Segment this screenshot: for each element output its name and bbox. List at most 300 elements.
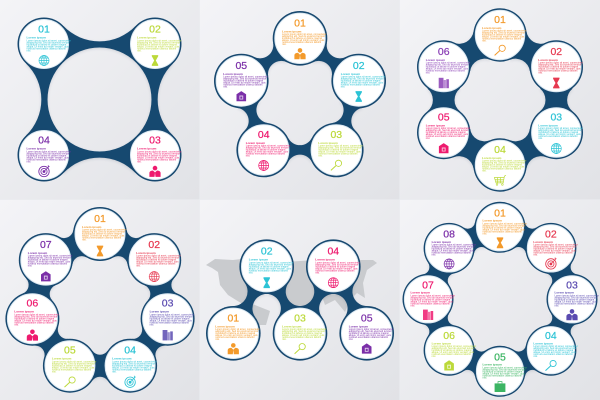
step 03: Lorem ipsum (318, 141, 338, 145)
step 05 (214, 54, 269, 108)
step 04 (236, 123, 291, 177)
step 04: nostrud exercitation ullamco laboris (315, 269, 355, 272)
step 02: adipiscing elit. Sed do eiusmod tempor (249, 263, 292, 266)
step 03: aliqua. Ut enim ad minim veniam, quis (538, 133, 581, 136)
step 02 (525, 223, 578, 274)
step 05: adipiscing elit. Sed do eiusmod tempor (349, 330, 392, 333)
step 01: incididunt ut labore et dolore magna (26, 43, 67, 46)
step 01: incididunt ut labore et dolore magna (82, 233, 122, 236)
step 01 (206, 306, 261, 361)
step 04: Lorem ipsum (533, 342, 553, 346)
step 04: nisi. (315, 271, 320, 274)
step 03: incididunt ut labore et dolore magna (137, 154, 177, 157)
step 01 (473, 8, 527, 62)
chain connectors (233, 283, 367, 317)
world map (206, 258, 377, 325)
step 03: nostrud exercitation ullamco laboris (282, 336, 322, 339)
step 07: incididunt ut labore et dolore magna (410, 298, 451, 301)
step 05: incididunt ut labore et dolore magna (349, 332, 389, 335)
step 06: aliqua. Ut enim ad minim veniam, quis (432, 351, 475, 354)
step 06: incididunt ut labore et dolore magna (14, 317, 55, 320)
step 02: aliqua. Ut enim ad minim veniam, quis (341, 82, 384, 85)
panel: four-step ring (0, 0, 200, 200)
step 01: 01 (494, 207, 506, 219)
step 03: nisi. (538, 137, 543, 140)
ring connectors (423, 223, 577, 376)
step 04: Lorem ipsum (315, 258, 335, 262)
step 03 (309, 123, 364, 177)
step 04: nisi. (482, 170, 487, 173)
step 05: nisi. (223, 86, 228, 89)
step 01: 01 (94, 213, 106, 225)
step 07: incididunt ut labore et dolore magna (28, 259, 68, 262)
step 04: 04 (124, 345, 136, 357)
step 02: incididunt ut labore et dolore magna (137, 43, 177, 46)
step 04: aliqua. Ut enim ad minim veniam, quis (315, 267, 358, 270)
step 05: aliqua. Ut enim ad minim veniam, quis (349, 334, 392, 337)
step 01: Lorem ipsum (482, 26, 502, 30)
step 04: Lorem ipsum dolor sit amet, consectetur (533, 345, 578, 348)
step 04 (103, 339, 157, 393)
step 06 (424, 325, 476, 376)
step 08: nisi. (432, 253, 436, 256)
step 05: aliqua. Ut enim ad minim veniam, quis (223, 82, 266, 85)
step 01: nostrud exercitation ullamco laboris (26, 47, 66, 50)
step 05: Lorem ipsum (482, 363, 502, 367)
step 01: Lorem ipsum (482, 219, 502, 223)
step 02: nisi. (341, 86, 345, 89)
step 02: nisi. (533, 253, 538, 256)
step 01: aliqua. Ut enim ad minim veniam, quis (482, 228, 525, 231)
step 03 (141, 292, 195, 346)
step 01: nostrud exercitation ullamco laboris (215, 336, 255, 339)
step 04: adipiscing elit. Sed do eiusmod tempor (315, 263, 358, 266)
step 04 (306, 239, 361, 294)
step 06: nisi. (426, 72, 430, 75)
step 08: nostrud exercitation ullamco laboris (432, 251, 472, 254)
step 07: aliqua. Ut enim ad minim veniam, quis (410, 300, 453, 303)
step 05: Lorem ipsum dolor sit amet, consectetur (482, 366, 527, 369)
step 01: adipiscing elit. Sed do eiusmod tempor (482, 224, 526, 227)
step 04: nostrud exercitation ullamco laboris (533, 353, 573, 356)
step 01 (18, 18, 71, 70)
step 04 (18, 128, 71, 182)
step 05: nostrud exercitation ullamco laboris (349, 336, 389, 339)
step 02: Lorem ipsum (341, 72, 360, 76)
step 01: Lorem ipsum (215, 324, 235, 328)
step 02: Lorem ipsum dolor sit amet, consectetur (137, 39, 182, 42)
step 06: Lorem ipsum dolor sit amet, consectetur (432, 345, 476, 348)
step 04: aliqua. Ut enim ad minim veniam, quis (112, 366, 155, 369)
ring connectors (427, 31, 573, 169)
step 06: 06 (27, 298, 38, 310)
step 04: nostrud exercitation ullamco laboris (482, 168, 522, 171)
step 06: nostrud exercitation ullamco laboris (426, 70, 466, 73)
panel: five-step chain on world map (200, 200, 400, 400)
step 03: adipiscing elit. Sed do eiusmod tempor (554, 296, 598, 299)
step 01: Lorem ipsum (282, 29, 302, 33)
step 03: Lorem ipsum dolor sit amet, consectetur (318, 145, 363, 148)
step 01: Lorem ipsum dolor sit amet, consectetur (82, 229, 127, 232)
step 02: 02 (148, 239, 160, 251)
step 01: aliqua. Ut enim ad minim veniam, quis (482, 36, 525, 39)
step 01: nisi. (282, 43, 287, 46)
step 01: aliqua. Ut enim ad minim veniam, quis (82, 235, 125, 238)
step 04: 04 (38, 135, 50, 147)
step 06: incididunt ut labore et dolore magna (432, 349, 472, 352)
step 08: 08 (443, 228, 455, 240)
step 06: adipiscing elit. Sed do eiusmod tempor (14, 315, 58, 318)
step 03: aliqua. Ut enim ad minim veniam, quis (150, 319, 193, 322)
step 06: adipiscing elit. Sed do eiusmod tempor (426, 64, 469, 67)
step 01 (474, 202, 527, 253)
step 02: incididunt ut labore et dolore magna (538, 66, 579, 69)
step 05 (417, 106, 470, 159)
step 06: nostrud exercitation ullamco laboris (432, 353, 472, 356)
step 02: 02 (353, 60, 365, 72)
step 02: nisi. (136, 265, 141, 268)
step 05: 05 (361, 312, 373, 324)
step 01: aliqua. Ut enim ad minim veniam, quis (26, 45, 69, 48)
step 04: incididunt ut labore et dolore magna (246, 149, 286, 152)
step 03: incididunt ut labore et dolore magna (282, 332, 322, 335)
step 02: Lorem ipsum (538, 58, 558, 62)
step 04: incididunt ut labore et dolore magna (26, 154, 67, 157)
step 01: Lorem ipsum dolor sit amet, consectetur (482, 222, 527, 225)
panel: eight-step ring (400, 200, 600, 400)
step 03: Lorem ipsum (150, 310, 169, 314)
step 03: aliqua. Ut enim ad minim veniam, quis (137, 156, 180, 159)
ring connectors (23, 230, 177, 381)
step 01: nostrud exercitation ullamco laboris (482, 230, 522, 233)
step 03: nisi. (150, 323, 154, 326)
step 02: adipiscing elit. Sed do eiusmod tempor (341, 78, 384, 81)
step 04: incididunt ut labore et dolore magna (315, 265, 356, 268)
step 02 (331, 54, 386, 108)
step 06: adipiscing elit. Sed do eiusmod tempor (432, 347, 475, 350)
step 01: Lorem ipsum dolor sit amet, consectetur (26, 39, 71, 42)
step 03: nisi. (137, 160, 142, 163)
step 05: 05 (494, 351, 506, 363)
step 02: incididunt ut labore et dolore magna (249, 265, 289, 268)
step 02: nostrud exercitation ullamco laboris (249, 269, 289, 272)
step 02: nisi. (249, 271, 253, 274)
step 05 (43, 339, 97, 393)
step 01: nisi. (215, 338, 220, 341)
step 05: Lorem ipsum dolor sit amet, consectetur (426, 127, 470, 130)
step 03 (128, 128, 182, 182)
step 03: incididunt ut labore et dolore magna (150, 317, 190, 320)
step 03: nostrud exercitation ullamco laboris (538, 135, 578, 138)
step 06: aliqua. Ut enim ad minim veniam, quis (426, 68, 469, 71)
step 04: nostrud exercitation ullamco laboris (246, 153, 286, 156)
step 08: Lorem ipsum (432, 240, 451, 244)
step 01: aliqua. Ut enim ad minim veniam, quis (282, 39, 325, 42)
step 01 (273, 11, 327, 66)
step 02: nisi. (538, 72, 543, 75)
step 03: incididunt ut labore et dolore magna (318, 149, 359, 152)
step 04: nisi. (112, 370, 117, 373)
step 08: aliqua. Ut enim ad minim veniam, quis (432, 249, 475, 252)
step 05: 05 (235, 60, 247, 72)
step 06: 06 (443, 330, 455, 342)
step 07: nostrud exercitation ullamco laboris (410, 302, 450, 305)
step 03: 03 (162, 298, 174, 310)
step 05: nostrud exercitation ullamco laboris (426, 135, 466, 138)
step 04: Lorem ipsum (246, 141, 265, 145)
step 04: nostrud exercitation ullamco laboris (26, 158, 66, 161)
step 02: adipiscing elit. Sed do eiusmod tempor (136, 257, 179, 260)
step 04: aliqua. Ut enim ad minim veniam, quis (533, 351, 576, 354)
step 02: Lorem ipsum (249, 258, 268, 262)
step 05: adipiscing elit. Sed do eiusmod tempor (482, 368, 526, 371)
panel: seven-step ring (0, 200, 200, 400)
step 04: Lorem ipsum dolor sit amet, consectetur (482, 160, 527, 163)
step 03: 03 (550, 112, 562, 124)
step 04: aliqua. Ut enim ad minim veniam, quis (246, 151, 289, 154)
step 02: incididunt ut labore et dolore magna (136, 259, 177, 262)
step 05: nisi. (52, 370, 57, 373)
step 03: Lorem ipsum (137, 147, 157, 151)
step 02: aliqua. Ut enim ad minim veniam, quis (249, 267, 292, 270)
step 02: aliqua. Ut enim ad minim veniam, quis (137, 45, 180, 48)
step 06 (417, 40, 470, 94)
step 01: 01 (494, 14, 506, 26)
step 03: nisi. (554, 304, 559, 307)
step 06: Lorem ipsum (432, 342, 451, 346)
step 03 (530, 106, 583, 159)
ring connectors (26, 26, 173, 173)
step 04: 04 (545, 330, 557, 342)
step 01: Lorem ipsum dolor sit amet, consectetur (282, 33, 327, 36)
step 04: Lorem ipsum dolor sit amet, consectetur (315, 261, 360, 264)
step 04: Lorem ipsum (26, 147, 46, 151)
step 07: adipiscing elit. Sed do eiusmod tempor (28, 257, 71, 260)
step 04: Lorem ipsum (482, 156, 502, 160)
step 01: adipiscing elit. Sed do eiusmod tempor (215, 330, 258, 333)
step 07: Lorem ipsum (28, 251, 47, 255)
step 01: nisi. (482, 232, 487, 235)
step 01: Lorem ipsum (26, 36, 46, 40)
step 03: Lorem ipsum (554, 291, 574, 295)
step 04 (525, 325, 578, 376)
step 04: Lorem ipsum dolor sit amet, consectetur (112, 360, 157, 363)
step 05: nisi. (426, 137, 430, 140)
step 06: incididunt ut labore et dolore magna (426, 66, 466, 69)
step 03: Lorem ipsum (282, 324, 302, 328)
step 02: Lorem ipsum dolor sit amet, consectetur (136, 255, 181, 258)
step 07 (402, 274, 455, 325)
step 02: nostrud exercitation ullamco laboris (341, 84, 381, 87)
step 03: nostrud exercitation ullamco laboris (137, 158, 177, 161)
step 04: incididunt ut labore et dolore magna (482, 164, 522, 167)
step 03: incididunt ut labore et dolore magna (554, 298, 595, 301)
step 08: adipiscing elit. Sed do eiusmod tempor (432, 245, 475, 248)
step 03 (273, 306, 327, 361)
step 01: 01 (38, 24, 50, 36)
step 01: nisi. (482, 40, 487, 43)
step 01: adipiscing elit. Sed do eiusmod tempor (26, 41, 70, 44)
step 05: nisi. (349, 338, 353, 341)
step 04: Lorem ipsum dolor sit amet, consectetur (246, 145, 290, 148)
step 02 (239, 239, 294, 294)
step 03: Lorem ipsum dolor sit amet, consectetur (137, 150, 182, 153)
panel: six-step ring (400, 0, 600, 200)
step 06: Lorem ipsum dolor sit amet, consectetur (14, 313, 59, 316)
step 06: aliqua. Ut enim ad minim veniam, quis (14, 319, 57, 322)
step 02: incididunt ut labore et dolore magna (341, 80, 381, 83)
step 05: incididunt ut labore et dolore magna (426, 131, 466, 134)
step 01: incididunt ut labore et dolore magna (282, 37, 322, 40)
step 04: aliqua. Ut enim ad minim veniam, quis (26, 156, 69, 159)
step 07: adipiscing elit. Sed do eiusmod tempor (410, 296, 454, 299)
step 02: Lorem ipsum dolor sit amet, consectetur (341, 76, 385, 79)
step 03: 03 (149, 135, 161, 147)
step 05: adipiscing elit. Sed do eiusmod tempor (426, 129, 469, 132)
step 03: 03 (294, 312, 306, 324)
step 02 (530, 40, 583, 94)
step 03: 03 (566, 279, 578, 291)
step 01: nostrud exercitation ullamco laboris (82, 237, 122, 240)
step 05: Lorem ipsum (426, 124, 445, 128)
step 05: Lorem ipsum (52, 357, 72, 361)
step 04: nisi. (533, 355, 538, 358)
step 05: incididunt ut labore et dolore magna (482, 370, 523, 373)
step 02: Lorem ipsum dolor sit amet, consectetur (538, 62, 583, 65)
step 04: 04 (494, 144, 506, 156)
step 07: nisi. (28, 265, 33, 268)
step 02: Lorem ipsum dolor sit amet, consectetur (249, 261, 293, 264)
step 06: nostrud exercitation ullamco laboris (14, 321, 54, 324)
panel: five-step ring (200, 0, 400, 200)
step 03: aliqua. Ut enim ad minim veniam, quis (554, 300, 597, 303)
step 03 (546, 274, 599, 325)
step 02: nostrud exercitation ullamco laboris (533, 251, 573, 254)
step 03: incididunt ut labore et dolore magna (538, 131, 579, 134)
step 01: Lorem ipsum dolor sit amet, consectetur (215, 328, 260, 331)
step 04: incididunt ut labore et dolore magna (112, 364, 152, 367)
step 02 (127, 233, 181, 287)
step 06: 06 (438, 46, 450, 58)
step 04: incididunt ut labore et dolore magna (533, 349, 574, 352)
step 04: adipiscing elit. Sed do eiusmod tempor (533, 347, 577, 350)
step 05: Lorem ipsum (349, 324, 368, 328)
step 02: nostrud exercitation ullamco laboris (538, 70, 578, 73)
step 04: aliqua. Ut enim ad minim veniam, quis (482, 166, 525, 169)
step 02: Lorem ipsum dolor sit amet, consectetur (533, 243, 578, 246)
step 02: nisi. (137, 49, 142, 52)
step 02: 02 (550, 46, 562, 58)
step 04: 04 (327, 246, 339, 258)
step 01: nisi. (82, 239, 87, 242)
step 01: Lorem ipsum (82, 225, 102, 229)
step 02: 02 (545, 228, 557, 240)
step 04: Lorem ipsum (112, 357, 132, 361)
step 05: incididunt ut labore et dolore magna (223, 80, 264, 83)
step 02: nostrud exercitation ullamco laboris (136, 263, 176, 266)
step 05: aliqua. Ut enim ad minim veniam, quis (482, 372, 525, 375)
step 03: Lorem ipsum dolor sit amet, consectetur (150, 313, 194, 316)
step 06: Lorem ipsum (14, 310, 34, 314)
step 01: 01 (227, 312, 239, 324)
step 01: aliqua. Ut enim ad minim veniam, quis (215, 334, 258, 337)
step 04: nostrud exercitation ullamco laboris (112, 368, 152, 371)
ring connectors (237, 43, 363, 162)
step 08 (424, 223, 476, 274)
step 08: incididunt ut labore et dolore magna (432, 247, 472, 250)
step 05: Lorem ipsum dolor sit amet, consectetur (349, 328, 393, 331)
step 07: Lorem ipsum dolor sit amet, consectetur (410, 294, 455, 297)
step 02: nostrud exercitation ullamco laboris (137, 47, 177, 50)
step 01: nisi. (26, 49, 31, 52)
step 05 (474, 346, 527, 397)
step 01: incididunt ut labore et dolore magna (482, 34, 522, 37)
step 02: aliqua. Ut enim ad minim veniam, quis (538, 68, 581, 71)
step 02: incididunt ut labore et dolore magna (533, 247, 574, 250)
step 02: Lorem ipsum (137, 36, 157, 40)
step 05: Lorem ipsum dolor sit amet, consectetur (223, 76, 268, 79)
step 02: 02 (149, 24, 161, 36)
step 04: adipiscing elit. Sed do eiusmod tempor (246, 147, 289, 150)
step 07: nisi. (410, 304, 415, 307)
step 06: nisi. (432, 355, 436, 358)
step 04: nisi. (26, 160, 31, 163)
step 02: adipiscing elit. Sed do eiusmod tempor (137, 41, 180, 44)
step 04: Lorem ipsum dolor sit amet, consectetur (26, 150, 71, 153)
step 03: nisi. (318, 155, 323, 158)
step 05: aliqua. Ut enim ad minim veniam, quis (52, 366, 95, 369)
step 05: nisi. (482, 376, 487, 379)
step 03: adipiscing elit. Sed do eiusmod tempor (318, 147, 361, 150)
step 04 (473, 138, 527, 192)
step 03: adipiscing elit. Sed do eiusmod tempor (137, 152, 180, 155)
step 02 (128, 18, 182, 70)
step 03: nostrud exercitation ullamco laboris (318, 153, 358, 156)
step 03: nostrud exercitation ullamco laboris (150, 321, 190, 324)
step 01: adipiscing elit. Sed do eiusmod tempor (82, 231, 125, 234)
step 05: nostrud exercitation ullamco laboris (223, 84, 263, 87)
step 02: aliqua. Ut enim ad minim veniam, quis (136, 261, 179, 264)
step 05 (339, 306, 394, 361)
step 01: adipiscing elit. Sed do eiusmod tempor (482, 32, 525, 35)
step 03: aliqua. Ut enim ad minim veniam, quis (318, 151, 361, 154)
step 02: Lorem ipsum (533, 240, 553, 244)
step 05: aliqua. Ut enim ad minim veniam, quis (426, 133, 469, 136)
step 04: nisi. (246, 155, 250, 158)
step 03: nisi. (282, 338, 287, 341)
step 08: Lorem ipsum dolor sit amet, consectetur (432, 243, 476, 246)
step 01: adipiscing elit. Sed do eiusmod tempor (282, 35, 325, 38)
step 04: adipiscing elit. Sed do eiusmod tempor (26, 152, 70, 155)
step 05: adipiscing elit. Sed do eiusmod tempor (52, 362, 95, 365)
step 04: adipiscing elit. Sed do eiusmod tempor (482, 162, 525, 165)
step 02: Lorem ipsum (136, 251, 156, 255)
step 05: Lorem ipsum (223, 72, 243, 76)
step 01: Lorem ipsum dolor sit amet, consectetur (482, 30, 527, 33)
step 05: incididunt ut labore et dolore magna (52, 364, 92, 367)
step 07: Lorem ipsum (410, 291, 430, 295)
step 07: Lorem ipsum dolor sit amet, consectetur (28, 255, 72, 258)
step 05: nostrud exercitation ullamco laboris (482, 374, 522, 377)
step 03: Lorem ipsum dolor sit amet, consectetur (554, 294, 599, 297)
step 07: nostrud exercitation ullamco laboris (28, 263, 68, 266)
step 01: incididunt ut labore et dolore magna (482, 226, 523, 229)
step 01: 01 (294, 17, 306, 29)
step 02: aliqua. Ut enim ad minim veniam, quis (533, 249, 576, 252)
step 02: 02 (261, 246, 273, 258)
step 06: Lorem ipsum (426, 58, 445, 62)
step 04: adipiscing elit. Sed do eiusmod tempor (112, 362, 155, 365)
